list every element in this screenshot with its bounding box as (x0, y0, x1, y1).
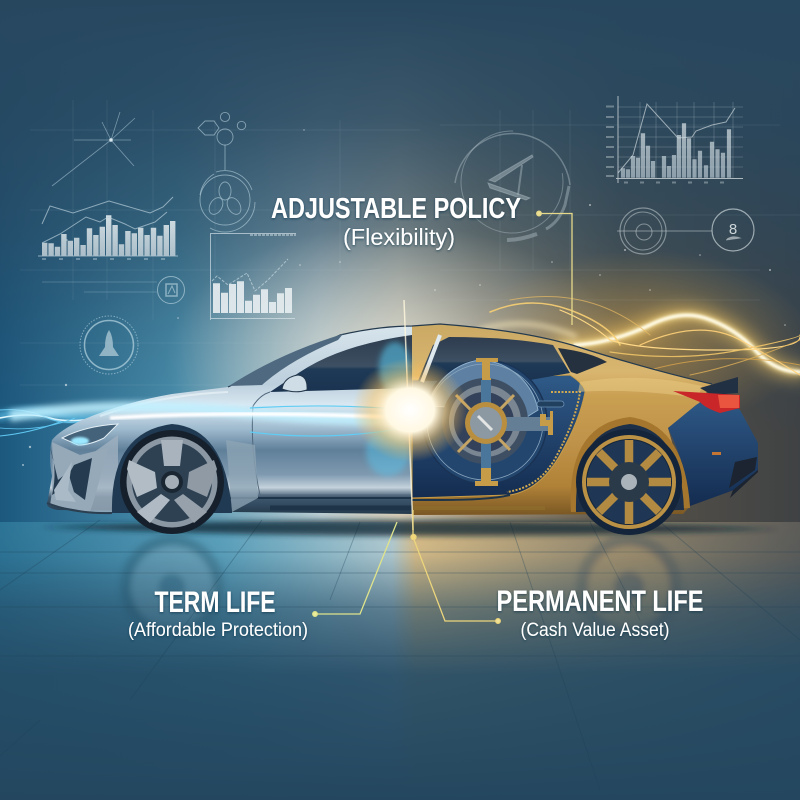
front grille and bumper (47, 442, 112, 513)
tail light and spoiler (673, 377, 740, 413)
navy door panel (412, 375, 585, 498)
icon: linked circles with 8 (617, 208, 754, 254)
car reflection (120, 535, 681, 626)
front wheel (120, 430, 224, 534)
marker light (712, 452, 721, 455)
title: adjustable policy: ADJUSTABLE POLICY (271, 193, 521, 225)
label: permanent life (496, 585, 704, 641)
callout line: term life (313, 522, 397, 616)
chart: left bar and line (38, 197, 178, 259)
icon: linked circles with 8: 8 (729, 221, 737, 238)
light streak and burst across car (10, 300, 505, 530)
chart: middle framed bar and line (210, 233, 296, 320)
icon: network star (52, 112, 135, 186)
gold light waves (480, 297, 800, 375)
front wheel arch (112, 424, 232, 513)
mirror (282, 375, 307, 392)
callout line: adjustable policy (537, 211, 572, 325)
label: term life (128, 586, 308, 641)
rear wheel arch (571, 417, 690, 512)
front fender shading (90, 435, 118, 512)
label: term life: (Affordable Protection) (128, 620, 308, 641)
grid lines (20, 100, 800, 385)
silver body (47, 326, 412, 514)
floor shadow (40, 520, 780, 536)
hood crease (100, 392, 228, 416)
navy rear panel (668, 395, 758, 506)
door handle and rivet trim (507, 392, 580, 492)
blue light streak left (0, 410, 130, 436)
vault door (423, 358, 553, 486)
label: term life: TERM LIFE (154, 586, 276, 619)
roof trim and body lines (228, 324, 712, 508)
rear gold highlight (578, 378, 702, 398)
icon: hexagons and flower circle (198, 112, 255, 232)
windows (270, 335, 607, 392)
rear wheel (576, 429, 682, 535)
icon: small square circle (42, 276, 184, 304)
headlight (62, 424, 118, 445)
title: adjustable policy (271, 193, 521, 250)
label: permanent life: (Cash Value Asset) (520, 620, 670, 641)
rear diffuser (729, 457, 758, 498)
icon: arc gauge (453, 123, 571, 241)
title: adjustable policy: (Flexibility) (343, 224, 455, 250)
particles (22, 129, 786, 466)
car: split silver and gold (47, 324, 758, 535)
floor (0, 520, 800, 800)
icon: rocket circle (80, 316, 138, 374)
gold body (412, 324, 712, 515)
label: permanent life: PERMANENT LIFE (496, 585, 704, 618)
chart: right bar and line (606, 96, 743, 183)
callout line: permanent life (411, 510, 500, 623)
